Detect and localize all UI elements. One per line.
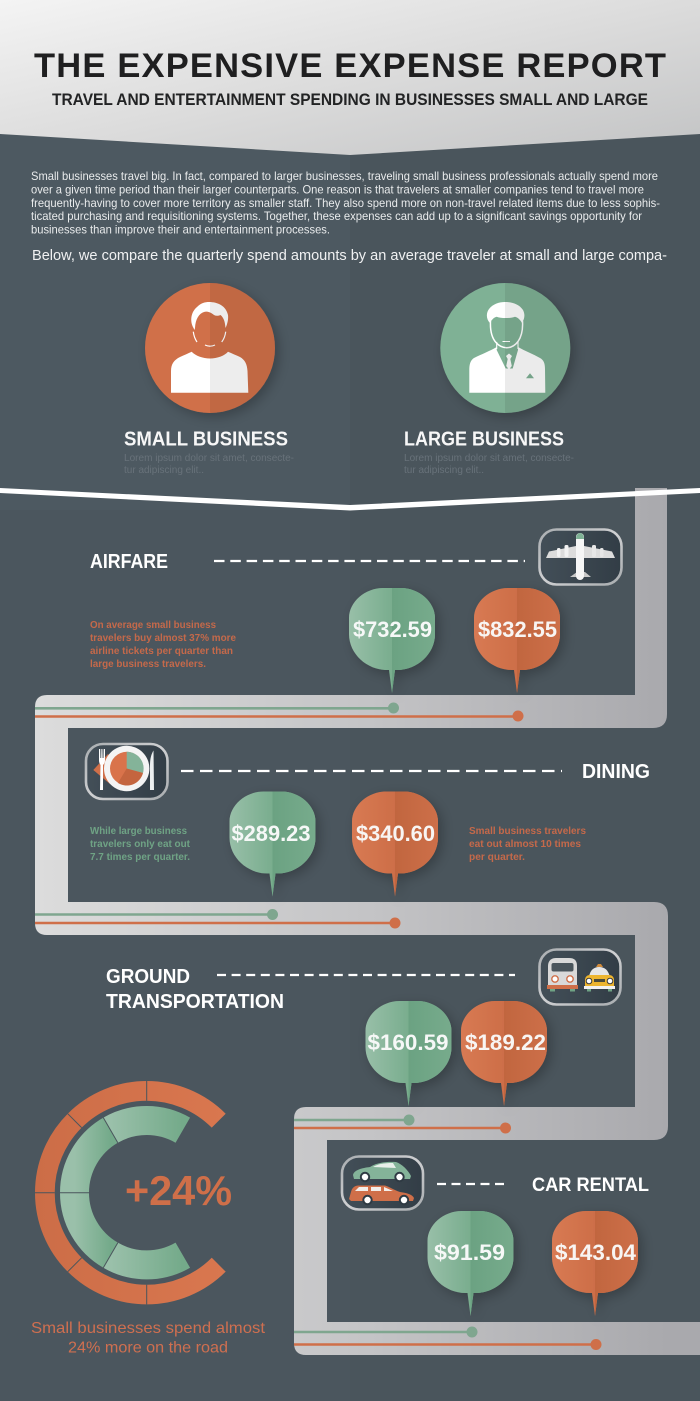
inner ring: large business [74,1120,183,1265]
ground transportation heading [106,966,284,1013]
road path [35,488,700,1355]
white chevron divider [0,488,700,510]
chart caption [31,1320,266,1356]
intro text: Small businesses travel big. In fact, compared to larger businesses, traveling small business professionals actually spend more [31,170,658,183]
icon: plate and cutlery [86,744,168,799]
airfare dashed connector [214,560,525,562]
car rental heading: CAR RENTAL [532,1175,649,1196]
bubble: large business dining [230,792,316,896]
bubble: large business car rental [428,1211,514,1316]
section: car rental [294,1156,649,1350]
large business label: tur adipiscing elit.. [404,465,484,476]
airfare markers [35,702,524,722]
icon: small business person [145,280,280,416]
icon: large business person [440,280,575,416]
large business label [404,428,574,476]
small business label [124,428,294,476]
dining note: small business: per quarter. [469,852,525,863]
chart caption: 24% more on the road [68,1340,228,1356]
outer ring: small business [45,1091,219,1295]
bubble: small business dining [352,792,438,896]
intro lead line: Below, we compare the quarterly spend amounts by an average traveler at small and large compa- [32,247,667,264]
small business label: Lorem ipsum dolor sit amet, consecte- [124,453,294,464]
chart caption: Small businesses spend almost [31,1320,266,1337]
intro text: frequently-having to cover more territory as smaller staff. They also spend more on non-travel related items due to less sophis- [31,197,660,210]
intro text [31,170,660,236]
bubble: large business ground: $160.59 [368,1030,448,1055]
ground markers [294,1114,511,1134]
dining markers [35,909,400,928]
small business label: SMALL BUSINESS [124,428,288,450]
big percentage: +24% [125,1167,232,1214]
radial chart: +24% [35,1081,219,1304]
section: dining [35,744,650,928]
intro text: ticated purchasing and requisitioning systems. Together, these expenses can add up to a significant savings opportunity for [31,210,642,223]
dining note: large business [90,826,191,863]
icon: airplane [540,530,622,584]
car rental markers [294,1326,602,1350]
airfare note: On average small business [90,620,216,631]
dining note: large business: 7.7 times per quarter. [90,852,190,863]
airfare note: travelers buy almost 37% more [90,633,236,644]
section: airfare [35,530,622,722]
bubble: large business airfare: $732.59 [353,617,432,642]
bubble: large business car rental: $91.59 [434,1240,505,1265]
airfare note: large business travelers. [90,659,206,670]
airfare heading: AIRFARE [90,551,168,573]
ring seams [35,1081,147,1304]
bubble: small business ground [461,1001,547,1106]
ground transportation heading: GROUND [106,966,190,988]
intro text: over a given time period than their larger counterparts. One reason is that travelers at smaller companies tend to travel more [31,184,644,196]
ground dashed connector [217,974,515,976]
car rental dashed connector [437,1183,508,1185]
airfare note [90,620,236,670]
dining note: small business: eat out almost 10 times [469,839,581,850]
dining note: small business: Small business travelers [469,826,586,837]
ground transportation heading: TRANSPORTATION [106,991,284,1013]
large business label: Lorem ipsum dolor sit amet, consecte- [404,453,574,464]
bubble: small business car rental [552,1211,638,1316]
bubble: large business ground [366,1001,452,1106]
header banner [0,0,700,155]
bubble: small business car rental: $143.04 [555,1240,637,1265]
bubble: large business dining: $289.23 [232,821,310,846]
dining dashed connector [181,770,562,772]
intro text: businesses than improve their and entertainment processes. [31,224,330,236]
large business label: LARGE BUSINESS [404,428,564,450]
dining note: large business: travelers only eat out [90,839,191,850]
subtitle: TRAVEL AND ENTERTAINMENT SPENDING IN BUSINESSES SMALL AND LARGE [52,90,648,109]
dining note: small business [469,826,586,863]
bubble: large business airfare [349,588,435,693]
icon: two cars [342,1156,423,1210]
small business label: tur adipiscing elit.. [124,465,204,476]
dining heading: DINING [582,761,650,783]
bubble: small business ground: $189.22 [465,1030,546,1055]
icon: bus and taxi [540,950,620,1004]
bubble: small business airfare [474,588,560,693]
dining note: large business: While large business [90,826,187,837]
bubble: small business dining: $340.60 [356,821,435,846]
bubble: small business airfare: $832.55 [478,617,557,642]
title: THE EXPENSIVE EXPENSE REPORT [34,47,666,85]
airfare note: airline tickets per quarter than [90,646,233,657]
section: ground transportation [106,950,620,1134]
